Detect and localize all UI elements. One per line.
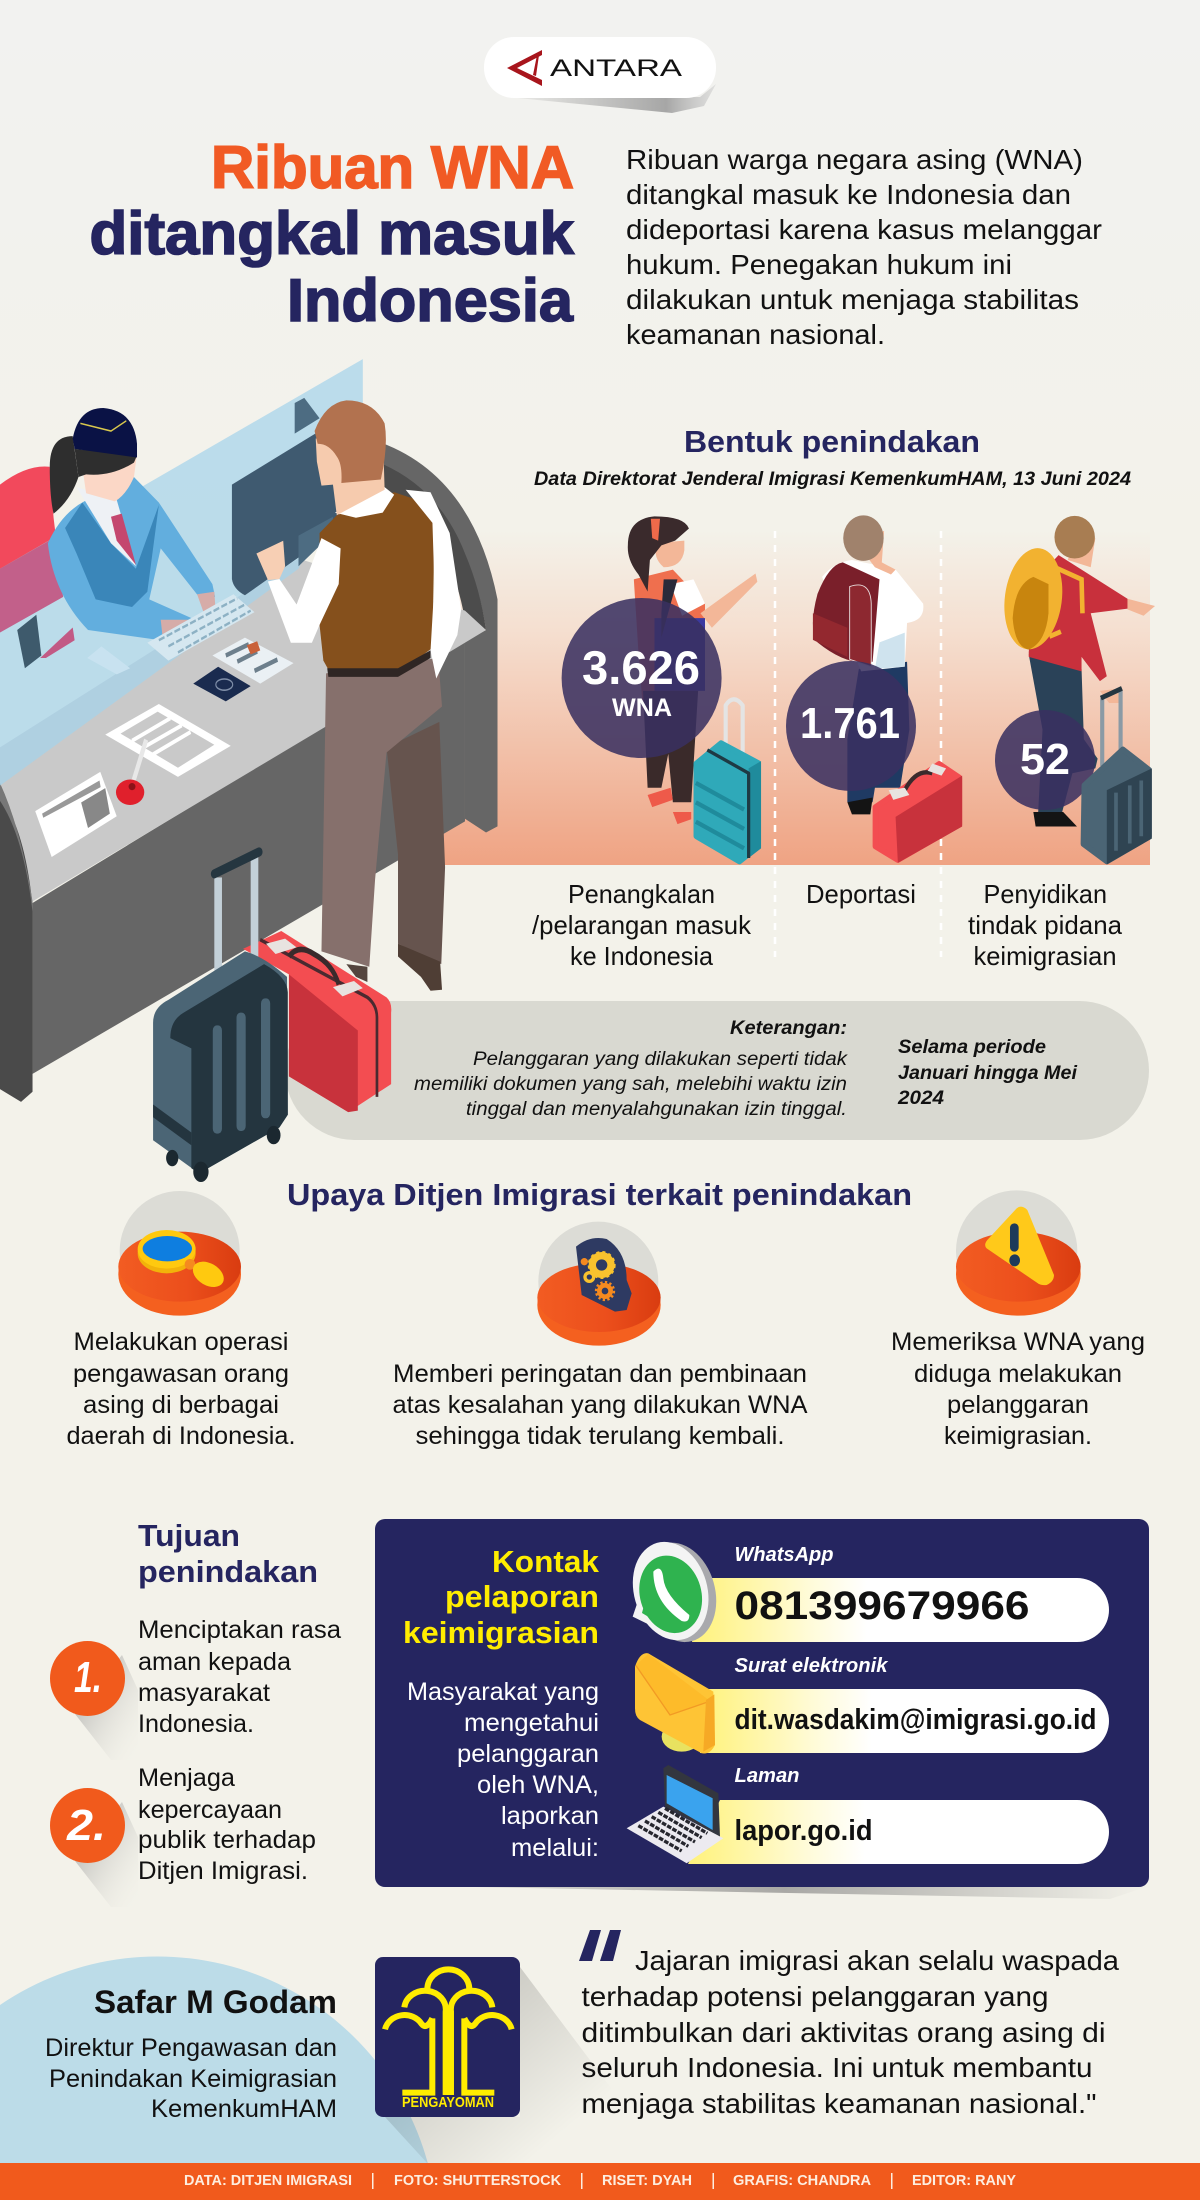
- contact row: WhatsApp: 081399679966: [734, 1584, 1030, 1628]
- text: operasi pengawasan: asing di berbagai: [83, 1391, 279, 1419]
- contact row: email: Surat elektronik: [734, 1655, 888, 1677]
- icon: warning on disc: [956, 1190, 1081, 1316]
- text: peringatan dan pembinaan: sehingga tidak terulang kembali.: [416, 1422, 784, 1450]
- text: tujuan 1: [138, 1616, 341, 1738]
- title: Indonesia: [287, 267, 574, 334]
- intro text: keamanan nasional.: [626, 319, 885, 350]
- heading: kontak: keimigrasian: [403, 1615, 599, 1650]
- text: laporan: laporkan: [501, 1802, 599, 1830]
- stat bubble: deportasi: 1.761: [800, 699, 900, 748]
- footer credits: FOTO: SHUTTERSTOCK: [394, 2173, 562, 2189]
- text: operasi pengawasan: Melakukan operasi: [74, 1328, 288, 1356]
- badge: number 1: 1.: [74, 1653, 102, 1702]
- desk front: [33, 640, 465, 1074]
- chair seen through glass: [0, 539, 75, 668]
- heading: Bentuk penindakan: Bentuk penindakan: [684, 424, 980, 459]
- speaker name and title: Safar M Godam: [94, 1984, 337, 2020]
- dark suitcase: [1083, 688, 1152, 864]
- contact row: website: [688, 1765, 1109, 1864]
- text: laporan: Masyarakat yang: [407, 1678, 599, 1706]
- heading: kontak: Kontak: [492, 1544, 600, 1579]
- icon: quotation mark: [579, 1930, 621, 1961]
- column dividers: [775, 531, 941, 957]
- category labels: ke Indonesia: [570, 941, 714, 971]
- red suitcase: [243, 931, 391, 1112]
- intro text: [626, 144, 1102, 350]
- text: operasi pengawasan: daerah di Indonesia.: [66, 1422, 296, 1450]
- period note: Januari hingga Mei: [898, 1063, 1078, 1084]
- keterangan text: [414, 1018, 848, 1120]
- right curved partition: [377, 441, 498, 833]
- text: memeriksa WNA: Memeriksa WNA yang: [891, 1328, 1145, 1356]
- pen holder: [116, 740, 146, 805]
- intro text: dideportasi karena kasus melanggar: [626, 214, 1102, 245]
- keterangan text: memiliki dokumen yang sah, melebihi waktu izin: [414, 1073, 847, 1095]
- footer credits: EDITOR: RANY: [912, 2173, 1016, 2189]
- text: laporan: [407, 1678, 599, 1862]
- card: [35, 772, 117, 857]
- mouse: [87, 646, 130, 674]
- visa document: [212, 638, 294, 684]
- heading: Tujuan penindakan: penindakan: [138, 1554, 318, 1589]
- stat bubble: penyidikan: [995, 710, 1095, 810]
- footer credits: [0, 2163, 1200, 2200]
- text: peringatan dan pembinaan: [392, 1360, 808, 1450]
- speaker name and title: KemenkumHAM: [151, 2095, 337, 2123]
- icon: laptop: [627, 1765, 723, 1863]
- footer credits: DATA: DITJEN IMIGRASI: [184, 2173, 352, 2189]
- text: memeriksa WNA: pelanggaran: [947, 1391, 1089, 1419]
- text: operasi pengawasan: pengawasan orang: [73, 1360, 289, 1388]
- text: operasi pengawasan: [66, 1328, 296, 1450]
- badge: number 2: 2.: [66, 1801, 106, 1850]
- heading: kontak: [403, 1544, 600, 1650]
- panel: gradient backdrop for statistics: [440, 530, 1150, 865]
- icon: envelope: [635, 1653, 715, 1754]
- heading: Upaya Ditjen Imigrasi: Upaya Ditjen Imigrasi terkait penindakan: [287, 1177, 912, 1212]
- contact row: WhatsApp: [692, 1544, 1109, 1642]
- category labels: Penangkalan: [568, 879, 715, 909]
- text: memeriksa WNA: [891, 1328, 1145, 1450]
- statistics illustrations: travellers: [628, 515, 1155, 827]
- category labels: /pelarangan masuk: [532, 910, 752, 940]
- desk top: [0, 559, 486, 901]
- logo: ANTARA: ANTARA: [550, 55, 682, 82]
- period note: 2024: [897, 1088, 944, 1109]
- contact icons: [622, 1533, 728, 1863]
- red suitcase: [875, 764, 962, 863]
- receptionist: [48, 408, 216, 640]
- footer credits: GRAFIS: CHANDRA: [733, 2173, 872, 2189]
- traveller woman: [628, 516, 757, 824]
- text: laporan: melalui:: [511, 1834, 599, 1862]
- passport: [193, 667, 251, 701]
- period note: [897, 1037, 1078, 1109]
- period note: Selama periode: [898, 1037, 1046, 1058]
- stat bubble: penangkalan: WNA: [612, 694, 672, 722]
- intro text: dilakukan untuk menjaga stabilitas: [626, 284, 1079, 315]
- quote text: menjaga stabilitas keamanan nasional.": [582, 2088, 1096, 2119]
- red chair: [0, 466, 63, 633]
- monitor: [232, 398, 341, 595]
- traveller man: [256, 400, 461, 991]
- quote text: Jajaran imigrasi akan selalu waspada: [635, 1945, 1119, 1976]
- stat bubble: penangkalan: [562, 598, 722, 758]
- traveller man with red backpack: [813, 515, 923, 814]
- keterangan text: Pelanggaran yang dilakukan seperti tidak: [473, 1048, 848, 1070]
- category labels: Deportasi: [806, 879, 916, 909]
- badge: number 2: [50, 1788, 138, 1907]
- keterangan text: Keterangan:: [730, 1018, 847, 1039]
- heading: Tujuan penindakan: [138, 1518, 318, 1589]
- text: tujuan 2: [138, 1764, 316, 1885]
- contact row: WhatsApp: WhatsApp: [734, 1544, 834, 1566]
- footer credits: RISET: DYAH: [602, 2173, 692, 2189]
- text: tujuan 2: Menjaga: [138, 1764, 235, 1792]
- text: tujuan 1: masyarakat: [138, 1679, 270, 1707]
- glass screen: [0, 359, 363, 786]
- luggage in front of stat bubbles: [696, 688, 1152, 864]
- contact row: email: [700, 1655, 1109, 1753]
- black suitcase: [153, 852, 288, 1182]
- quote text: seluruh Indonesia. Ini untuk membantu: [582, 2052, 1092, 2083]
- contact row: website: Laman: [734, 1765, 800, 1787]
- text: peringatan dan pembinaan: Memberi peringatan dan pembinaan: [393, 1360, 807, 1388]
- blue quarter backdrop behind speaker: [0, 1956, 428, 2164]
- text: laporan: pelanggaran: [457, 1740, 599, 1768]
- text: tujuan 2: publik terhadap: [138, 1826, 316, 1854]
- title: [90, 134, 575, 334]
- text: tujuan 1: Menciptakan rasa: [138, 1616, 341, 1644]
- icon: whatsapp: [622, 1533, 728, 1651]
- category labels: Penyidikan: [984, 879, 1107, 909]
- speaker name and title: Direktur Pengawasan dan: [45, 2034, 337, 2062]
- quote text: terhadap potensi pelanggaran yang: [582, 1981, 1048, 2012]
- stat bubble: penyidikan: 52: [1020, 735, 1070, 784]
- category labels: [532, 879, 1123, 971]
- heading: Tujuan penindakan: Tujuan: [138, 1518, 240, 1553]
- panel: kontak pelaporan: [375, 1519, 1149, 1899]
- speaker name and title: Penindakan Keimigrasian: [49, 2065, 337, 2093]
- text: peringatan dan pembinaan: atas kesalahan yang dilakukan WNA: [392, 1391, 808, 1419]
- title: Ribuan WNA: [211, 134, 574, 201]
- source line: Data Direktorat Jenderal Imigrasi KemenkumHAM, 13 Juni 2024: [534, 469, 1131, 490]
- category labels: tindak pidana: [968, 910, 1123, 940]
- text: tujuan 2: Ditjen Imigrasi.: [138, 1857, 308, 1885]
- text: memeriksa WNA: diduga melakukan: [914, 1360, 1122, 1388]
- text: memeriksa WNA: keimigrasian.: [944, 1422, 1092, 1450]
- desk left end: [0, 783, 33, 1102]
- speaker name and title: [45, 1984, 337, 2123]
- text: laporan: oleh WNA,: [477, 1771, 599, 1799]
- paper form: [105, 704, 231, 777]
- logo: pengayoman emblem: [375, 1957, 620, 2164]
- icon: magnifier on disc: [118, 1191, 241, 1316]
- quote text: [582, 1945, 1119, 2119]
- title: ditangkal masuk: [90, 200, 575, 267]
- text: tujuan 2: kepercayaan: [138, 1796, 282, 1824]
- intro text: Ribuan warga negara asing (WNA): [626, 144, 1083, 175]
- traveller man with yellow backpack: [998, 516, 1155, 827]
- panel: keterangan pill background: [285, 1001, 1149, 1140]
- contact row: website: lapor.go.id: [734, 1815, 872, 1847]
- contact row: email: dit.wasdakim@imigrasi.go.id: [734, 1704, 1096, 1736]
- icon: head with gears on disc: [537, 1222, 661, 1346]
- category labels: keimigrasian: [974, 941, 1116, 971]
- text: tujuan 1: aman kepada: [138, 1648, 291, 1676]
- text: laporan: mengetahui: [464, 1709, 599, 1737]
- heading: kontak: pelaporan: [445, 1579, 599, 1614]
- stat bubble: penangkalan: 3.626: [582, 641, 700, 694]
- text: tujuan 1: Indonesia.: [138, 1710, 254, 1738]
- badge: number 1: [50, 1641, 138, 1760]
- teal suitcase: [696, 699, 761, 861]
- keyboard: [147, 594, 254, 661]
- illustration: immigration counter: [0, 359, 498, 1182]
- logo: ANTARA: [484, 37, 716, 113]
- intro text: hukum. Penegakan hukum ini: [626, 249, 1012, 280]
- keterangan text: tinggal dan menyalahgunakan izin tinggal.: [466, 1098, 847, 1120]
- logo: pengayoman emblem: PENGAYOMAN: [402, 2094, 494, 2111]
- intro text: ditangkal masuk ke Indonesia dan: [626, 179, 1071, 210]
- stat bubble: deportasi: [786, 661, 916, 791]
- quote text: ditimbulkan dari aktivitas orang asing di: [582, 2017, 1106, 2048]
